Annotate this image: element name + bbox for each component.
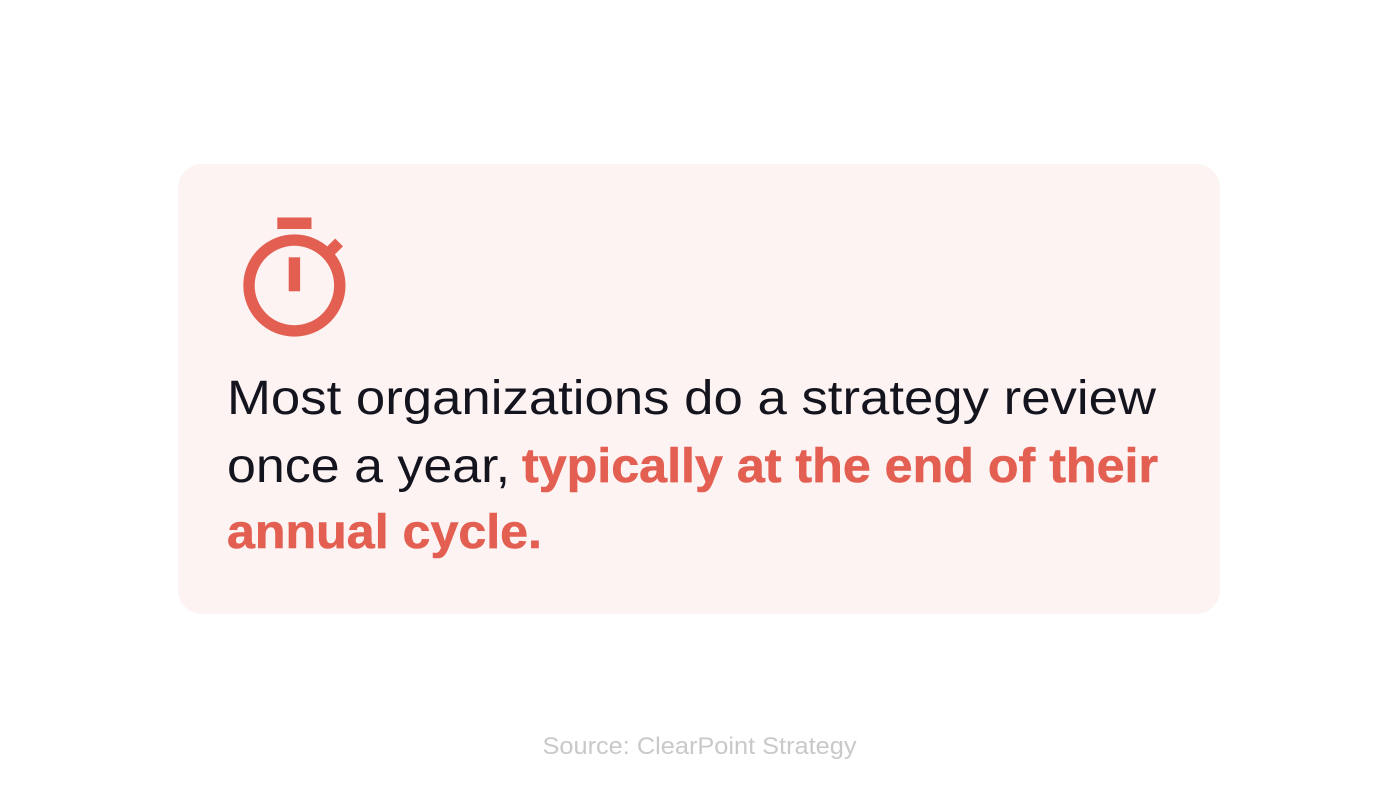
- panel: callout card: [178, 164, 1220, 614]
- callout text: annual cycle.: [227, 506, 542, 559]
- icon: stopwatch: [249, 218, 343, 331]
- callout text: [227, 372, 1158, 559]
- callout text: once a year,: [227, 440, 510, 493]
- callout text: typically at the end of their: [522, 440, 1158, 493]
- callout text: Most organizations do a strategy review: [227, 372, 1156, 425]
- source note: Source: ClearPoint Strategy: [542, 733, 856, 760]
